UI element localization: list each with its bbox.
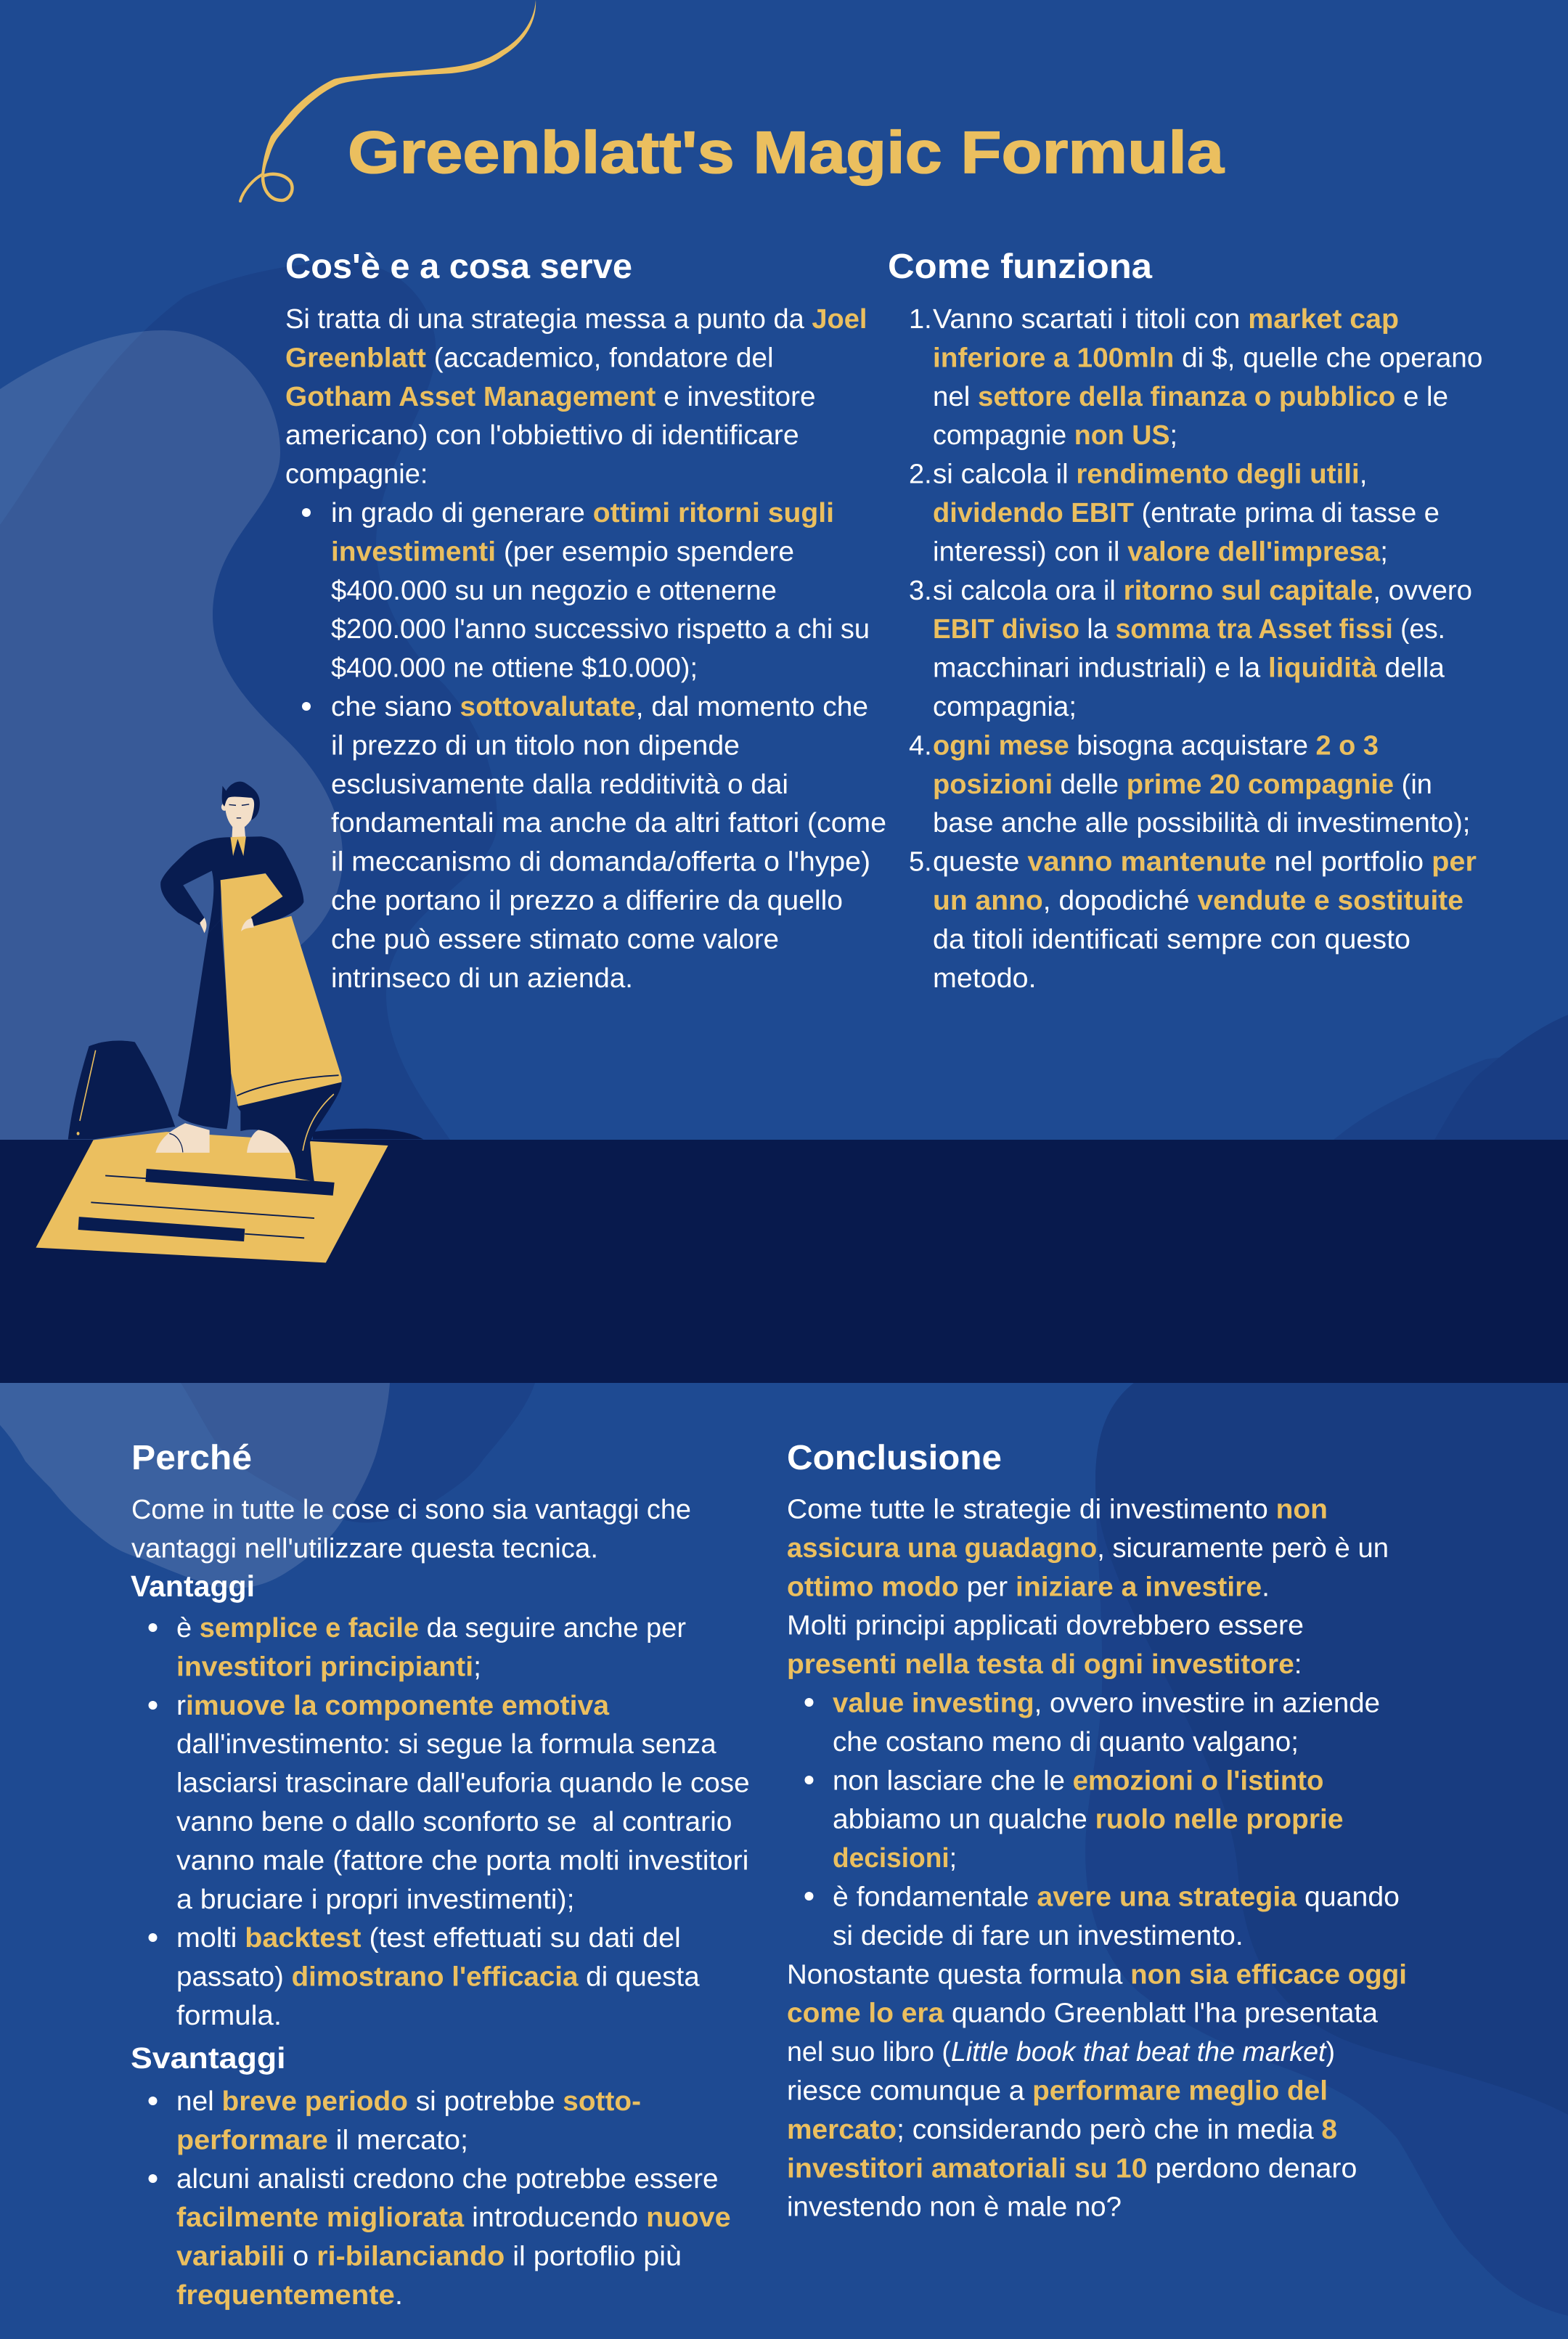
document <box>36 1132 388 1262</box>
heading: Cos'è e a cosa serve <box>285 248 632 286</box>
closing text: mercato; considerando però che in media 8 <box>787 2115 1337 2145</box>
bullet list <box>804 1689 1400 1951</box>
intro text <box>285 304 867 490</box>
list: svantaggi: alcuni analisti credono che potrebbe essere <box>176 2164 719 2195</box>
bullet list: il meccanismo di domanda/offerta o l'hype) <box>331 847 870 878</box>
bullet list: value investing, ovvero investire in aziende <box>833 1689 1380 1719</box>
background blobs: top section <box>0 262 1568 1140</box>
bullet list: esclusivamente dalla redditività o dai <box>331 770 788 800</box>
heading: Perché <box>131 1439 252 1477</box>
numbered list: si calcola il rendimento degli utili, <box>933 460 1368 490</box>
list: vantaggi: molti backtest (test effettuati su dati del <box>176 1923 681 1954</box>
bullet list: investimenti (per esempio spendere <box>331 536 794 567</box>
bullet list: $400.000 su un negozio e ottenerne <box>331 576 777 606</box>
bullet list: il prezzo di un titolo non dipende <box>331 730 740 761</box>
list: vantaggi: investitori principianti ; <box>176 1652 481 1682</box>
list: svantaggi: facilmente migliorata introducendo nuove <box>176 2203 731 2233</box>
numbered list: 2. <box>909 460 932 490</box>
bullet list: in grado di generare ottimi ritorni sugli <box>331 498 834 528</box>
intro text: americano) con l'obbiettivo di identificare <box>285 420 799 451</box>
numbered list: base anche alle possibilità di investimento); <box>933 808 1471 838</box>
numbered list: da titoli identificati sempre con questo <box>933 924 1410 955</box>
closing text: riesce comunque a performare meglio del <box>787 2076 1328 2107</box>
intro text: presenti nella testa di ogni investitore : <box>787 1649 1302 1680</box>
closing text: Nonostante questa formula non sia efficace oggi <box>787 1959 1407 1990</box>
closing text: investitori amatoriali su 10 perdono denaro <box>787 2153 1357 2184</box>
list: vantaggi: vanno bene o dallo sconforto se al contrario <box>176 1807 732 1837</box>
bullet list: che portano il prezzo a differire da quello <box>331 886 843 916</box>
closing text <box>787 1959 1407 2223</box>
panel: conclusione <box>787 1439 1407 2223</box>
panel: perché <box>131 1439 750 2311</box>
numbered list: interessi) con il valore dell'impresa; <box>933 536 1388 567</box>
illustration: person standing on a document <box>36 782 423 1262</box>
bullet list: si decide di fare un investimento. <box>833 1921 1244 1951</box>
numbered list: compagnie non US; <box>933 420 1177 451</box>
intro text: Gotham Asset Management e investitore <box>285 382 816 412</box>
bullet list: che costano meno di quanto valgano; <box>833 1727 1299 1758</box>
intro text: assicura una guadagno, sicuramente però è un <box>787 1533 1389 1564</box>
bullet list: decisioni; <box>833 1843 957 1874</box>
intro text <box>787 1494 1389 1680</box>
subheading: svantaggi: Svantaggi <box>131 2041 286 2075</box>
numbered list: EBIT diviso la somma tra Asset fissi (es. <box>933 614 1445 645</box>
list: vantaggi <box>148 1613 750 2031</box>
list: vantaggi: a bruciare i propri investimenti); <box>176 1885 575 1915</box>
numbered list: 5. <box>909 847 932 878</box>
list: svantaggi: variabili o ri-bilanciando il portoflio più <box>176 2242 682 2272</box>
intro text: Come in tutte le cose ci sono sia vantaggi che <box>131 1495 691 1525</box>
closing text: nel suo libro (Little book that beat the market) <box>787 2037 1335 2067</box>
intro text: Come tutte le strategie di investimento non <box>787 1494 1328 1524</box>
intro text: Si tratta di una strategia messa a punto da Joel <box>285 304 867 335</box>
heading: Come funziona <box>888 248 1152 286</box>
numbered list <box>909 304 1482 994</box>
numbered list: si calcola ora il ritorno sul capitale, ovvero <box>933 576 1472 606</box>
bullet list: è fondamentale avere una strategia quando <box>833 1882 1400 1912</box>
bullet list: $400.000 ne ottiene $10.000); <box>331 653 698 684</box>
list: svantaggi: frequentemente . <box>176 2280 403 2311</box>
decorative swoosh <box>240 0 536 201</box>
list: vantaggi: rimuove la componente emotiva <box>176 1691 610 1721</box>
floor shadow <box>313 1129 423 1139</box>
dark floor band <box>0 1140 1568 1383</box>
numbered list: Vanno scartati i titoli con market cap <box>933 304 1399 335</box>
numbered list: ogni mese bisogna acquistare 2 o 3 <box>933 730 1379 761</box>
intro text <box>131 1495 691 1564</box>
bullet list: intrinseco di un azienda. <box>331 963 633 994</box>
lamp <box>68 1041 175 1139</box>
list: vantaggi: vanno male (fattore che porta molti investitori <box>176 1845 748 1876</box>
background blobs: bottom section <box>0 1383 1568 2316</box>
list: vantaggi: formula. <box>176 2001 282 2031</box>
numbered list: 4. <box>909 730 932 761</box>
list: svantaggi: performare il mercato; <box>176 2125 468 2155</box>
bullet list: abbiamo un qualche ruolo nelle proprie <box>833 1805 1343 1835</box>
list: svantaggi <box>148 2086 731 2311</box>
bullet list: che può essere stimato come valore <box>331 924 779 955</box>
intro text: vantaggi nell'utilizzare questa tecnica. <box>131 1533 598 1564</box>
numbered list: posizioni delle prime 20 compagnie (in <box>933 770 1432 800</box>
numbered list: inferiore a 100mln di $, quelle che operano <box>933 343 1482 373</box>
intro text: Molti principi applicati dovrebbero essere <box>787 1611 1304 1641</box>
subheading: vantaggi: Vantaggi <box>131 1569 255 1603</box>
bullet list: fondamentali ma anche da altri fattori (come <box>331 808 886 838</box>
bullet list: che siano sottovalutate, dal momento che <box>331 692 868 722</box>
heading: Conclusione <box>787 1439 1002 1477</box>
bullet list <box>302 498 886 994</box>
numbered list: compagnia; <box>933 692 1077 722</box>
closing text: investendo non è male no? <box>787 2192 1122 2223</box>
intro text: Greenblatt (accademico, fondatore del <box>285 343 774 373</box>
numbered list: 1. <box>909 304 932 335</box>
title: Greenblatt's Magic Formula <box>348 120 1225 186</box>
bullet list: $200.000 l'anno successivo rispetto a chi su <box>331 614 870 645</box>
list: vantaggi: passato) dimostrano l'efficacia di questa <box>176 1962 701 1993</box>
numbered list: queste vanno mantenute nel portfolio per <box>933 847 1477 878</box>
numbered list: metodo. <box>933 963 1037 994</box>
numbered list: dividendo EBIT (entrate prima di tasse e <box>933 498 1440 528</box>
list: svantaggi: nel breve periodo si potrebbe sotto- <box>176 2086 641 2117</box>
numbered list: nel settore della finanza o pubblico e le <box>933 382 1448 412</box>
panel: come funziona <box>888 248 1482 994</box>
list: vantaggi: è semplice e facile da seguire anche per <box>176 1613 686 1644</box>
intro text: ottimo modo per iniziare a investire . <box>787 1572 1270 1602</box>
panel: cos'è e a cosa serve <box>285 248 886 994</box>
numbered list: un anno, dopodiché vendute e sostituite <box>933 886 1463 916</box>
list: vantaggi: dall'investimento: si segue la formula senza <box>176 1729 716 1760</box>
numbered list: macchinari industriali) e la liquidità della <box>933 653 1445 684</box>
numbered list: 3. <box>909 576 932 606</box>
intro text: compagnie: <box>285 460 428 490</box>
closing text: come lo era quando Greenblatt l'ha presentata <box>787 1999 1379 2029</box>
bullet list: non lasciare che le emozioni o l'istinto <box>833 1766 1324 1796</box>
list: vantaggi: lasciarsi trascinare dall'euforia quando le cose <box>176 1768 750 1799</box>
person <box>155 782 342 1182</box>
